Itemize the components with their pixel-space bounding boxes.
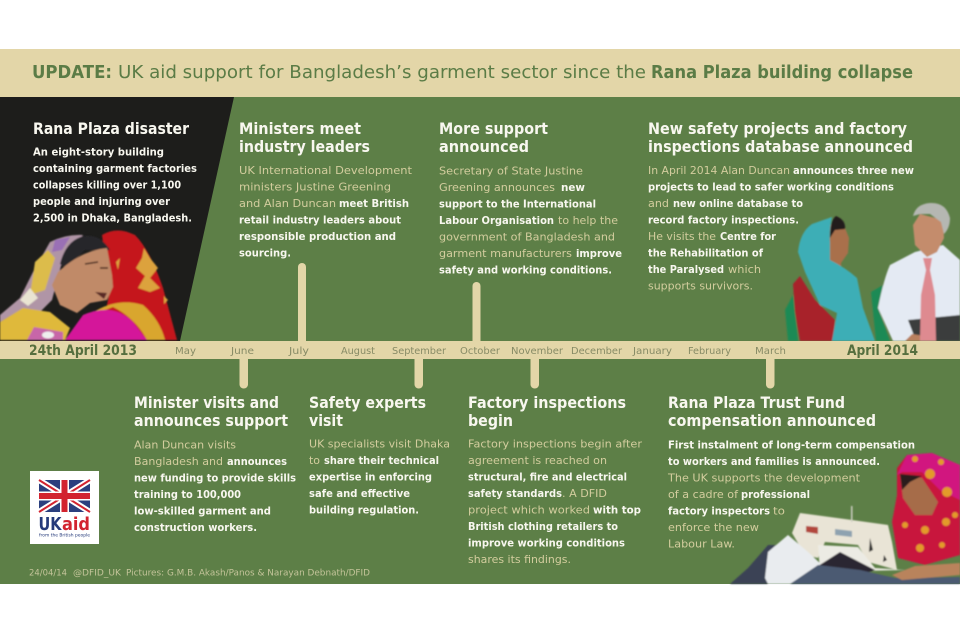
body: record factory inspections. bbox=[648, 214, 799, 226]
body: The UK supports the development bbox=[667, 472, 861, 484]
body: An eight-story building bbox=[33, 146, 164, 158]
body: new online database to bbox=[673, 197, 803, 210]
body: safety and working conditions. bbox=[439, 264, 612, 276]
footer credits bbox=[29, 568, 370, 578]
start date: 24th April 2013 bbox=[29, 343, 137, 359]
body: structural, fire and electrical bbox=[468, 470, 627, 484]
body: sourcing. bbox=[239, 246, 291, 260]
heading: Rana Plaza Trust Fund bbox=[668, 393, 845, 412]
photo: two women embracing bbox=[0, 230, 177, 340]
logo: UK aid bbox=[30, 471, 99, 544]
logo: UK aid: aid bbox=[62, 514, 90, 535]
heading bbox=[439, 119, 548, 156]
heading: Minister visits and bbox=[134, 393, 279, 412]
body: Centre for bbox=[720, 230, 777, 243]
body bbox=[239, 164, 413, 260]
body: of a cadre of bbox=[668, 488, 739, 501]
body: to help the bbox=[558, 214, 618, 227]
body: enforce the new bbox=[668, 521, 759, 534]
text: New safety projects bbox=[648, 119, 914, 292]
body: support to the International bbox=[439, 198, 596, 210]
body: to bbox=[773, 504, 785, 518]
body: UK specialists visit Dhaka bbox=[309, 438, 450, 450]
body: with top bbox=[593, 504, 641, 516]
heading: More support bbox=[439, 119, 548, 138]
heading bbox=[134, 393, 288, 430]
body: announces bbox=[227, 455, 287, 468]
body: meet British bbox=[339, 197, 409, 210]
body: responsible production and bbox=[239, 230, 396, 243]
body: expertise in enforcing bbox=[309, 470, 432, 484]
banner: title: Rana Plaza building collapse bbox=[651, 62, 913, 83]
body: to bbox=[309, 454, 320, 467]
heading bbox=[239, 119, 370, 156]
body: share their technical bbox=[324, 454, 439, 467]
body: which bbox=[728, 263, 761, 276]
text: Factory inspections begin bbox=[468, 393, 642, 566]
body bbox=[667, 438, 915, 550]
body: building regulation. bbox=[309, 504, 419, 516]
body: British clothing retailers to bbox=[468, 520, 618, 533]
text: Minister visits bbox=[134, 393, 296, 534]
text: Rana Plaza Trust Fund bbox=[667, 393, 915, 550]
body: shares its findings. bbox=[468, 553, 571, 566]
body: safety standards bbox=[468, 487, 562, 500]
body: 2,500 in Dhaka, Bangladesh. bbox=[33, 212, 192, 224]
banner: title bbox=[0, 49, 960, 97]
body: First instalment of long-term compensation bbox=[668, 438, 915, 452]
months bbox=[175, 346, 786, 357]
body: Labour Law. bbox=[668, 538, 735, 550]
months: December bbox=[571, 346, 623, 357]
body: the Rehabilitation of bbox=[648, 246, 763, 260]
banner: title: UPDATE: bbox=[32, 62, 112, 83]
heading bbox=[648, 119, 913, 156]
text: Ministers meet industry leaders bbox=[239, 119, 413, 260]
body: UK International Development bbox=[239, 164, 413, 177]
body bbox=[648, 164, 914, 292]
body: . A DFID bbox=[562, 487, 607, 500]
body: Bangladesh and bbox=[134, 455, 223, 468]
end date: April 2014 bbox=[847, 343, 918, 359]
body: low-skilled garment and bbox=[134, 504, 271, 518]
footer credits: Pictures: G.M.B. Akash/Panos & Narayan Debnath/DFID bbox=[126, 568, 370, 578]
months: October bbox=[460, 346, 501, 357]
body: He visits the bbox=[648, 230, 716, 243]
body: garment manufacturers bbox=[439, 247, 572, 260]
text: Safety experts visit bbox=[309, 393, 450, 516]
black panel: Rana Plaza disaster bbox=[0, 97, 234, 341]
body: collapses killing over 1,100 bbox=[33, 178, 181, 192]
body: announces three new bbox=[793, 164, 914, 177]
heading: visit bbox=[309, 411, 343, 430]
heading: begin bbox=[468, 411, 513, 430]
months: January bbox=[632, 346, 672, 357]
body: people and injuring over bbox=[33, 195, 171, 208]
body: improve bbox=[576, 247, 622, 260]
green background panel bbox=[0, 97, 960, 584]
body: Greening announces bbox=[439, 181, 555, 194]
body: supports survivors. bbox=[648, 280, 753, 292]
footer credits: 24/04/14 bbox=[29, 568, 67, 578]
months: February bbox=[688, 346, 731, 357]
body: new funding to provide skills bbox=[134, 472, 296, 484]
text: More support announced bbox=[439, 119, 622, 276]
icon: union flag bbox=[39, 480, 90, 512]
body: Alan Duncan visits bbox=[134, 438, 236, 452]
body: ministers Justine Greening bbox=[239, 180, 391, 194]
logo: UK aid: from the British people bbox=[39, 532, 90, 538]
heading: compensation announced bbox=[668, 411, 876, 430]
heading: New safety projects and factory bbox=[648, 119, 908, 138]
body: government of Bangladesh and bbox=[439, 230, 615, 244]
timeline band bbox=[0, 341, 960, 359]
months: May bbox=[175, 346, 196, 357]
months: August bbox=[341, 346, 375, 357]
body: the Paralysed bbox=[648, 263, 724, 276]
body: projects to lead to safer working conditions bbox=[648, 180, 894, 194]
text: Rana Plaza disaster bbox=[33, 119, 197, 224]
heading: Ministers meet bbox=[239, 119, 361, 138]
logo: UK aid: UK bbox=[38, 514, 62, 535]
body bbox=[439, 164, 622, 276]
body bbox=[309, 438, 450, 516]
footer credits: @DFID_UK bbox=[73, 568, 121, 578]
heading bbox=[309, 393, 426, 430]
heading: Factory inspections bbox=[468, 393, 626, 412]
body: professional bbox=[741, 488, 810, 501]
heading: announced bbox=[439, 137, 529, 156]
months: July bbox=[288, 346, 309, 357]
photo: woman and Alan Duncan seated bbox=[785, 203, 960, 341]
body: containing garment factories bbox=[33, 162, 197, 175]
months: September bbox=[392, 346, 447, 357]
body: agreement is reached on bbox=[468, 454, 607, 467]
photo: garment worker at sewing machine bbox=[730, 453, 960, 584]
body: Factory inspections begin after bbox=[468, 438, 642, 450]
body: and bbox=[648, 197, 669, 210]
heading bbox=[468, 393, 626, 430]
body: safe and effective bbox=[309, 487, 410, 500]
heading: announces support bbox=[134, 411, 288, 430]
body: improve working conditions bbox=[468, 536, 625, 550]
body: Secretary of State Justine bbox=[439, 164, 583, 178]
heading bbox=[668, 393, 876, 430]
body: to workers and families is announced. bbox=[668, 455, 880, 468]
body: training to 100,000 bbox=[134, 488, 241, 501]
body: project which worked bbox=[468, 504, 590, 516]
body: retail industry leaders about bbox=[239, 214, 401, 226]
heading: inspections database announced bbox=[648, 137, 913, 156]
body: factory inspectors bbox=[668, 504, 770, 518]
body: new bbox=[561, 181, 585, 194]
timeline markers bbox=[240, 263, 774, 388]
body: Labour Organisation bbox=[439, 214, 554, 227]
body bbox=[468, 438, 642, 566]
months: November bbox=[511, 346, 564, 357]
heading: Safety experts bbox=[309, 393, 426, 412]
body bbox=[134, 438, 296, 534]
heading: industry leaders bbox=[239, 137, 370, 156]
banner: title: UK aid support for Bangladesh’s garment sector since the bbox=[118, 62, 646, 83]
months: June bbox=[230, 346, 254, 357]
body: In April 2014 Alan Duncan bbox=[648, 164, 790, 177]
body bbox=[33, 146, 197, 224]
heading: Rana Plaza disaster bbox=[33, 119, 189, 138]
months: March bbox=[755, 346, 786, 357]
body: construction workers. bbox=[134, 521, 257, 534]
body: and Alan Duncan bbox=[239, 197, 336, 210]
